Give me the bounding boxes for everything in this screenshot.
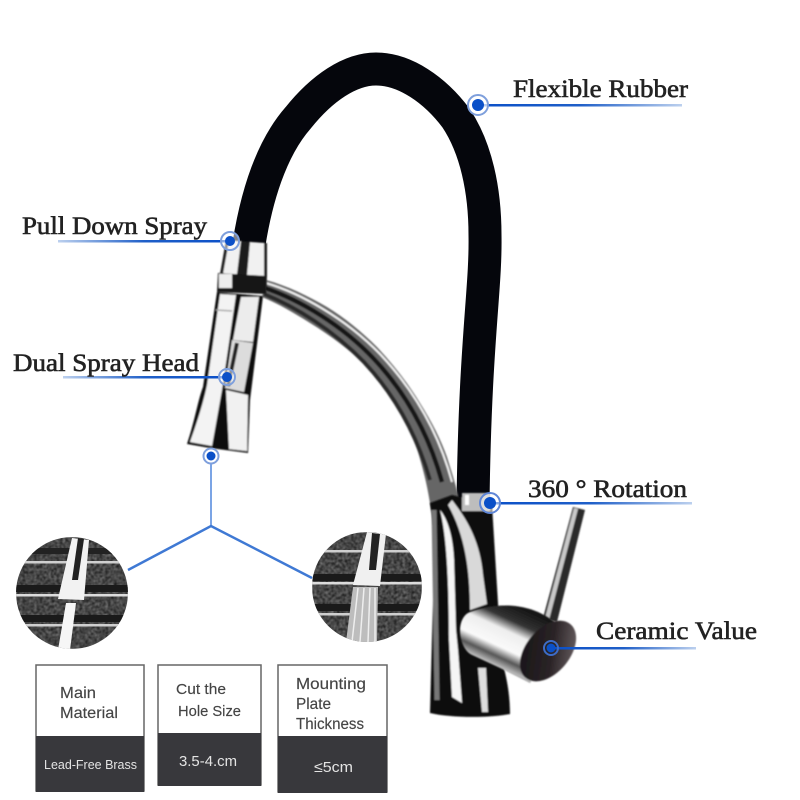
spec box: hole size: Hole Size: [178, 703, 241, 720]
callout: ceramic value: Ceramic Value: [596, 618, 757, 645]
spec box: hole size: Cut the: [176, 681, 226, 698]
spec box: mounting plate thickness: Plate: [296, 696, 331, 713]
callout: dual spray head: Dual Spray Head: [13, 350, 200, 377]
callout: 360 rotation: 360 ° Rotation: [528, 476, 688, 503]
black ring: [217, 273, 267, 294]
hose collar: [220, 240, 267, 276]
spec box: mounting plate thickness: ≤5cm: [314, 759, 353, 776]
spec box: mounting plate thickness: [278, 665, 387, 793]
spec box: main material: Material: [60, 705, 118, 722]
callout: 360 rotation: [480, 476, 692, 513]
curved chrome spout: [262, 280, 462, 525]
callout: ceramic value: [544, 618, 757, 655]
spec box: main material: Lead-Free Brass: [44, 758, 137, 772]
spec box: main material: [36, 665, 144, 792]
spec box: mounting plate thickness: Mounting: [296, 676, 366, 693]
nozzle body: [187, 292, 263, 453]
ceramic valve cylinder: [460, 605, 587, 692]
mode button: [225, 340, 253, 392]
circle: stream spray mode: [16, 537, 128, 650]
callout: pull down spray: Pull Down Spray: [22, 213, 208, 240]
callout: flexible rubber: [468, 76, 689, 115]
spec box: mounting plate thickness: Thickness: [296, 716, 364, 733]
flexible rubber hose: [249, 69, 485, 505]
spec box: hole size: 3.5-4.cm: [179, 753, 237, 770]
pull-down spray head: [187, 240, 267, 453]
callout: dual spray head: [13, 350, 235, 385]
spec box: main material: Main: [60, 685, 96, 702]
spec box: hole size: [158, 665, 261, 786]
lever handle: [543, 507, 585, 622]
hose connector: [462, 493, 490, 511]
callout: flexible rubber: Flexible Rubber: [513, 76, 689, 103]
circle: shower spray mode: [312, 532, 422, 642]
callout: spray modes connector: [128, 448, 312, 578]
nozzle band: [216, 310, 232, 311]
faucet body: [430, 493, 510, 717]
callout: pull down spray: [22, 213, 239, 250]
